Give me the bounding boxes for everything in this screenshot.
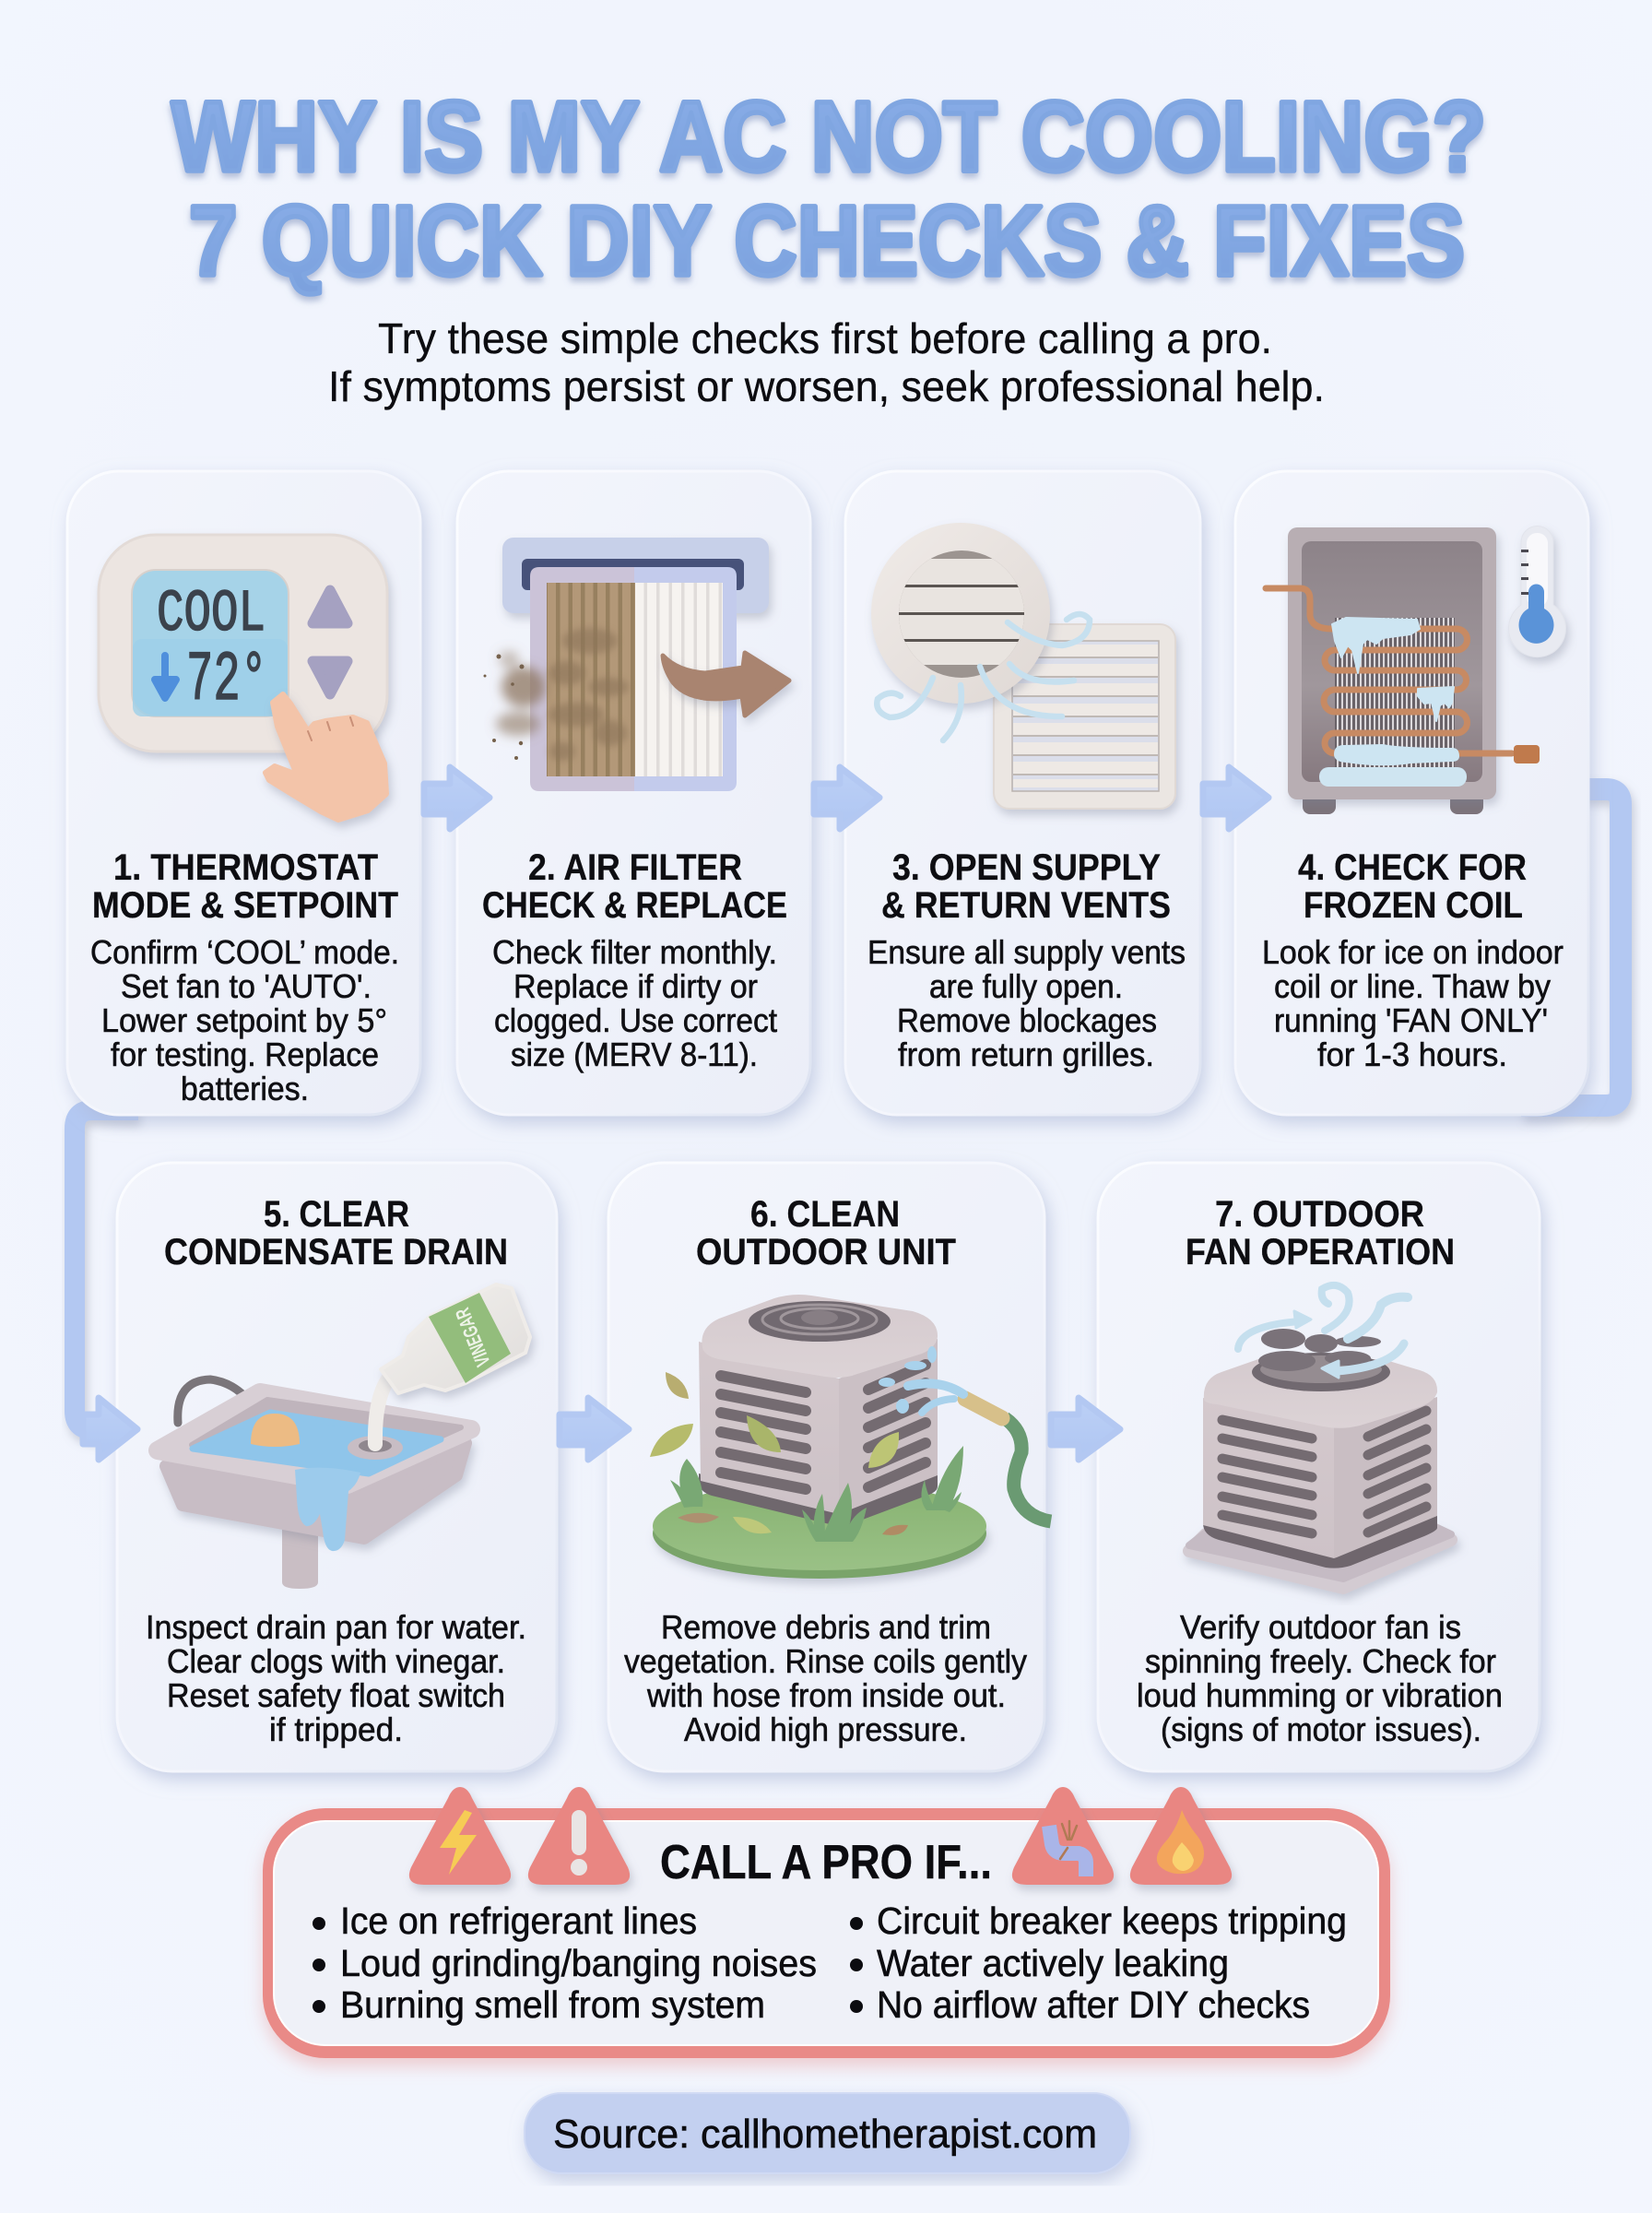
body text: for testing. Replace [111, 1035, 379, 1073]
icon: lightning warning [409, 1787, 511, 1885]
icon: frozen evaporator coil with thermometer [1266, 526, 1565, 814]
heading: MODE & SETPOINT [92, 885, 398, 926]
body text: Check filter monthly. [492, 933, 777, 971]
body text: Inspect drain pan for water. [146, 1608, 526, 1646]
arrow: connector from step 4 to step 5, right side [1521, 789, 1621, 1106]
list: right column: No airflow after DIY checks [877, 1983, 1310, 2026]
list: left column: Burning smell from system [340, 1983, 765, 2026]
body text: spinning freely. Check for [1145, 1642, 1496, 1680]
body text [1137, 1608, 1503, 1748]
body text [146, 1608, 526, 1748]
heading: OUTDOOR UNIT [696, 1232, 956, 1272]
arrow: step 3 to step 4 [1203, 767, 1268, 829]
body text: Ensure all supply vents [867, 933, 1186, 971]
heading: CONDENSATE DRAIN [164, 1232, 508, 1272]
icon: leaking pipe warning [1012, 1787, 1114, 1885]
heading: 4. CHECK FOR [1298, 847, 1527, 888]
panel: step 3 vents [845, 471, 1200, 1115]
panel: step 7 outdoor fan [1098, 1163, 1540, 1771]
panel: step 2 air filter [457, 471, 810, 1115]
body text: Lower setpoint by 5° [101, 1001, 387, 1039]
heading: 5. CLEAR [264, 1194, 409, 1235]
title: WHY IS MY AC NOT COOLING? [171, 80, 1486, 192]
heading: 2. AIR FILTER [528, 847, 742, 888]
list: right column: Water actively leaking [877, 1942, 1229, 1984]
body text: Reset safety float switch [167, 1676, 505, 1714]
list: right column: Circuit breaker keeps tripping [877, 1899, 1347, 1942]
source pill: Source: callhometherapist.com [553, 2112, 1097, 2157]
list: left column: Ice on refrigerant lines [340, 1899, 697, 1942]
heading: CALL A PRO IF... [660, 1836, 992, 1889]
icon: exclamation warning [528, 1787, 630, 1885]
body text: vegetation. Rinse coils gently [624, 1642, 1027, 1680]
body text: Remove debris and trim [661, 1608, 991, 1646]
body text [492, 933, 777, 1073]
icon: drain pan with vinegar bottle [158, 1284, 530, 1589]
body text: Replace if dirty or [513, 967, 758, 1005]
icon: thermostat with pressing hand: 72° [186, 641, 267, 720]
body text: Confirm ‘COOL’ mode. [90, 933, 399, 971]
panel: step 1 thermostat [67, 471, 420, 1115]
icon: outdoor unit on grass with hose [650, 1295, 1051, 1579]
list: left column [313, 1899, 817, 2026]
arrow: into step 5 [83, 1398, 137, 1460]
list: left column: Loud grinding/banging noises [340, 1942, 817, 1984]
body text [624, 1608, 1027, 1748]
subtitle: Try these simple checks first before calling a pro. [378, 314, 1272, 362]
arrow: step 6 to step 7 [1051, 1398, 1120, 1460]
icon: outdoor unit with spinning fan [1189, 1285, 1451, 1588]
heading: 3. OPEN SUPPLY [892, 847, 1161, 888]
panel: call a pro [263, 1787, 1390, 2058]
source pill [525, 2093, 1130, 2173]
body text: running 'FAN ONLY' [1274, 1001, 1548, 1039]
title [171, 80, 1486, 296]
arrow: connector from step 4 to step 5, left side [75, 1110, 138, 1429]
arrow: step 1 to step 2 [424, 767, 490, 829]
icon: fire warning [1130, 1787, 1232, 1885]
body text: Set fan to 'AUTO'. [121, 967, 372, 1005]
arrow: step 5 to step 6 [560, 1398, 629, 1460]
subtitle: If symptoms persist or worsen, seek professional help. [328, 362, 1325, 410]
body text: Remove blockages [897, 1001, 1157, 1039]
body text: Look for ice on indoor [1262, 933, 1564, 971]
body text: batteries. [181, 1070, 309, 1107]
panel: step 6 clean outdoor unit [608, 1163, 1051, 1771]
title: 7 QUICK DIY CHECKS & FIXES [189, 184, 1465, 296]
body text [867, 933, 1186, 1073]
heading [92, 847, 398, 926]
heading: 7. OUTDOOR [1215, 1194, 1424, 1235]
icon: thermostat with pressing hand: COOL [157, 582, 266, 648]
heading: CHECK & REPLACE [482, 885, 787, 926]
heading [1298, 847, 1527, 926]
panel: step 4 frozen coil [1235, 471, 1588, 1115]
body text: (signs of motor issues). [1161, 1710, 1481, 1748]
body text: if tripped. [269, 1710, 403, 1748]
body text [90, 933, 399, 1107]
heading [881, 847, 1171, 926]
icon: thermostat with pressing hand [99, 535, 387, 820]
heading: 6. CLEAN [750, 1194, 900, 1235]
list: right column [850, 1899, 1347, 2026]
body text: with hose from inside out. [646, 1676, 1006, 1714]
body text: clogged. Use correct [494, 1001, 777, 1039]
heading [696, 1194, 956, 1272]
heading: & RETURN VENTS [881, 885, 1171, 926]
heading [1186, 1194, 1455, 1272]
heading [164, 1194, 508, 1272]
heading: 1. THERMOSTAT [113, 847, 378, 888]
heading [482, 847, 787, 926]
body text: size (MERV 8-11). [511, 1035, 758, 1073]
icon: supply vent, return grille and airflow [871, 523, 1175, 809]
body text: Verify outdoor fan is [1180, 1608, 1461, 1646]
body text: Avoid high pressure. [684, 1710, 967, 1748]
arrow: step 2 to step 3 [814, 767, 879, 829]
body text: loud humming or vibration [1137, 1676, 1503, 1714]
heading: FAN OPERATION [1186, 1232, 1455, 1272]
body text: coil or line. Thaw by [1274, 967, 1551, 1005]
body text: are fully open. [929, 967, 1123, 1005]
body text: Clear clogs with vinegar. [167, 1642, 505, 1680]
body text: from return grilles. [898, 1035, 1154, 1073]
subtitle [328, 314, 1325, 410]
heading: FROZEN COIL [1304, 885, 1523, 926]
body text: for 1-3 hours. [1317, 1035, 1507, 1073]
icon: drain pan with vinegar bottle: VINEGAR [451, 1305, 495, 1369]
panel: step 5 condensate drain [117, 1163, 557, 1771]
icon: air filter half dirty half clean [483, 538, 789, 791]
body text [1262, 933, 1564, 1073]
